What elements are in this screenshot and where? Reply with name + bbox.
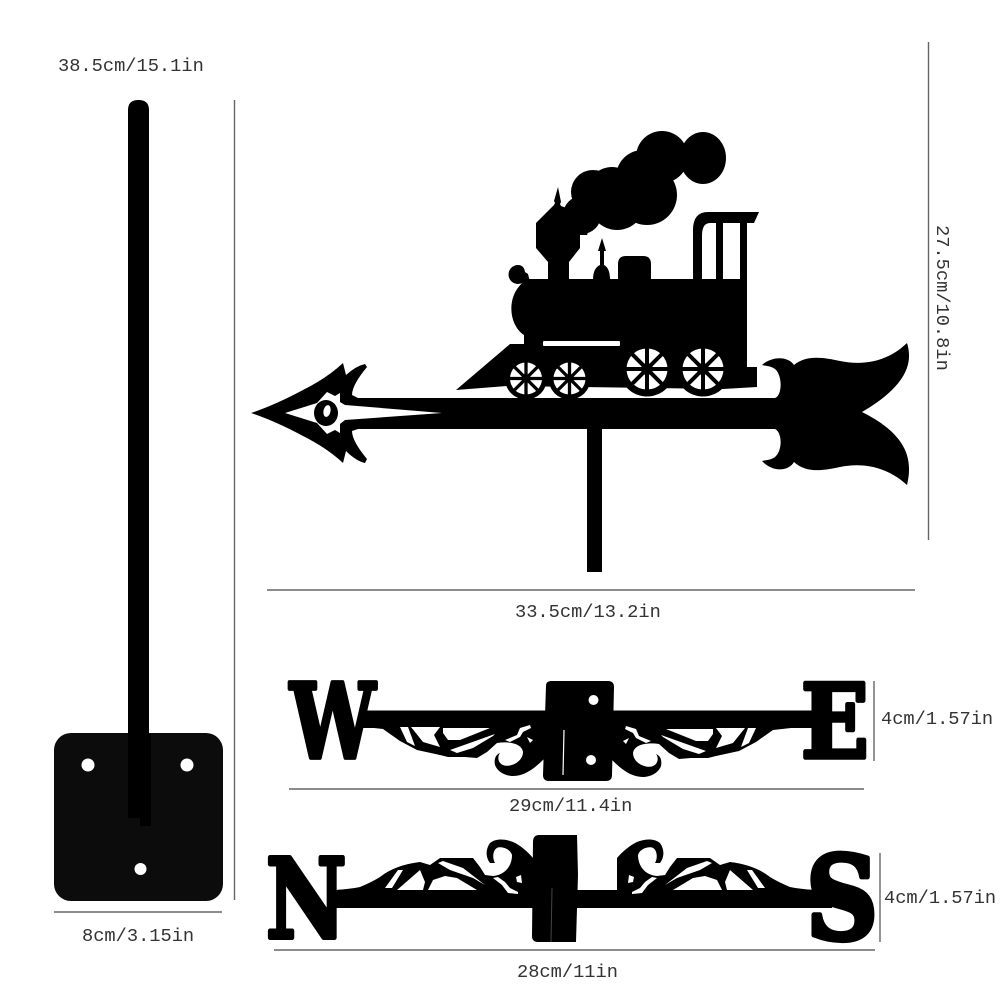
ring opening xyxy=(322,404,332,418)
dimension: NS height xyxy=(880,853,996,942)
wheel: first large xyxy=(620,342,674,396)
locomotive body xyxy=(456,279,757,390)
dimension: WE height: 4cm/1.57in xyxy=(881,708,993,730)
chimney xyxy=(536,187,592,280)
dimension: WE height xyxy=(874,681,993,761)
side rod xyxy=(543,341,620,346)
arrow head cut-out xyxy=(285,392,442,434)
vertical post xyxy=(587,428,602,572)
north-south direction arm xyxy=(266,832,878,967)
arrow head ring xyxy=(314,400,338,426)
letter E: E xyxy=(801,662,869,782)
left ornament xyxy=(365,725,545,776)
dimension: pole length: 38.5cm/15.1in xyxy=(58,55,204,77)
right ornament xyxy=(611,726,791,777)
dimension: WE length: 29cm/11.4in xyxy=(509,795,632,817)
arrow head xyxy=(251,363,442,463)
smoke cloud xyxy=(563,131,726,234)
vertical pole xyxy=(128,100,151,826)
dimension: NS length: 28cm/11in xyxy=(517,961,618,983)
wheel: second small xyxy=(548,358,590,400)
mounting plate xyxy=(54,733,223,901)
pole and mounting plate xyxy=(54,100,223,901)
mounting hole bottom xyxy=(134,863,146,875)
arm bar xyxy=(334,890,832,908)
left ornament xyxy=(335,839,533,894)
train weathervane xyxy=(251,131,909,572)
whistle xyxy=(593,238,610,280)
dimension: plate width: 8cm/3.15in xyxy=(82,925,194,947)
west-east direction arm xyxy=(289,662,869,783)
dimension: NS height: 4cm/1.57in xyxy=(884,887,996,909)
arm bar xyxy=(362,710,812,728)
dimension: vane height: 27.5cm/10.8in xyxy=(931,225,953,371)
letter W: W xyxy=(289,662,376,783)
mounting hole top right xyxy=(180,758,194,772)
steam dome xyxy=(618,256,651,280)
central bracket xyxy=(532,835,578,942)
letter S: S xyxy=(806,832,878,967)
arrow tail xyxy=(762,343,909,485)
right ornament xyxy=(617,839,815,894)
letter N: N xyxy=(266,835,346,964)
wheel: second large xyxy=(676,342,730,396)
arrow shaft xyxy=(340,398,790,429)
mounting hole top left xyxy=(82,758,94,772)
headlight xyxy=(509,265,530,284)
dimension: vane width: 33.5cm/13.2in xyxy=(515,601,661,623)
wheel: front small xyxy=(505,358,547,400)
cab xyxy=(693,212,759,282)
central bracket xyxy=(543,681,614,781)
